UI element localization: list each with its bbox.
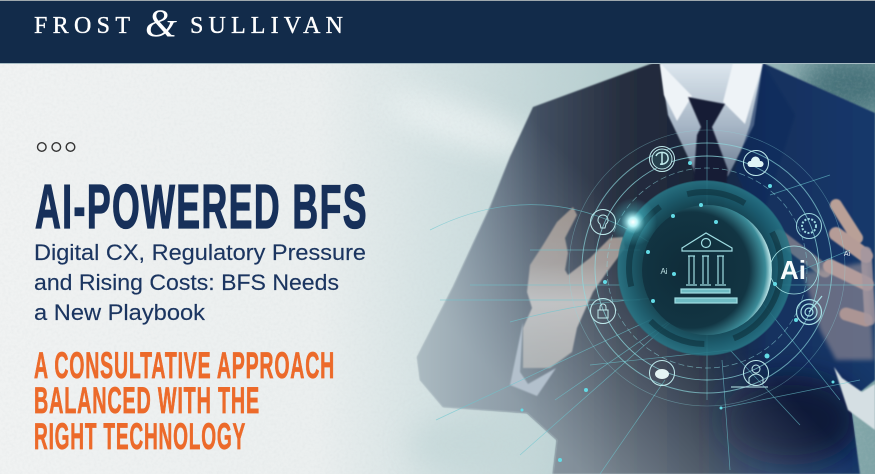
small Ai label, right hand: Ai [844, 251, 851, 258]
glare highlight [609, 198, 657, 246]
outer teal ring [617, 180, 793, 356]
right shirt cuff [834, 367, 875, 430]
right hand palm [803, 262, 874, 360]
icon: person [731, 360, 768, 387]
shirt [660, 63, 763, 176]
necktie [688, 97, 728, 225]
jacket shadow, lower right [720, 375, 860, 465]
icon: cloud [744, 150, 768, 176]
icon: gear [796, 214, 822, 238]
logo: Frost & Sullivan: & [145, 2, 178, 45]
suit jacket [417, 63, 875, 474]
subtitle: Digital CX, Regulatory Pressure [34, 240, 366, 265]
glowing nodes [520, 161, 834, 462]
header band [0, 0, 875, 64]
Ai badge [770, 246, 818, 294]
collar [660, 63, 763, 124]
orange tagline: A CONSULTATIVE APPROACH [34, 345, 335, 386]
left hand [523, 207, 625, 368]
icon: piggy bank [650, 360, 674, 386]
icon: brain [650, 146, 674, 172]
icon: light bulb [590, 210, 616, 234]
right lapel [735, 63, 795, 225]
small Ai label, inside globe: Ai [660, 267, 668, 276]
decorative three circles icon [38, 143, 75, 151]
subtitle: a New Playbook [34, 300, 206, 325]
left cuff [510, 322, 556, 396]
orange tagline: RIGHT TECHNOLOGY [34, 416, 246, 457]
logo: Frost & Sullivan: SULLIVAN [190, 13, 343, 39]
network lines [430, 120, 875, 474]
Ai badge: Ai [780, 255, 806, 285]
icon: target [796, 296, 822, 324]
logo: Frost & Sullivan [34, 2, 343, 45]
right hand fingers [779, 205, 870, 320]
inner ring segments [629, 192, 781, 344]
orange tagline: BALANCED WITH THE [34, 380, 260, 421]
AI globe hologram [430, 120, 875, 474]
orange tagline [34, 345, 335, 457]
subtitle: and Rising Costs: BFS Needs [34, 270, 339, 295]
bottom fade over jacket [417, 63, 875, 474]
photo: businessman holding AI globe [417, 63, 875, 474]
icon: padlock [590, 298, 616, 324]
logo: Frost & Sullivan: FROST [34, 13, 130, 39]
subtitle [34, 240, 366, 325]
main title: AI-POWERED BFS [35, 172, 368, 242]
globe sphere [642, 205, 772, 335]
concentric orbit rings [569, 130, 845, 406]
bank building icon [675, 233, 737, 303]
